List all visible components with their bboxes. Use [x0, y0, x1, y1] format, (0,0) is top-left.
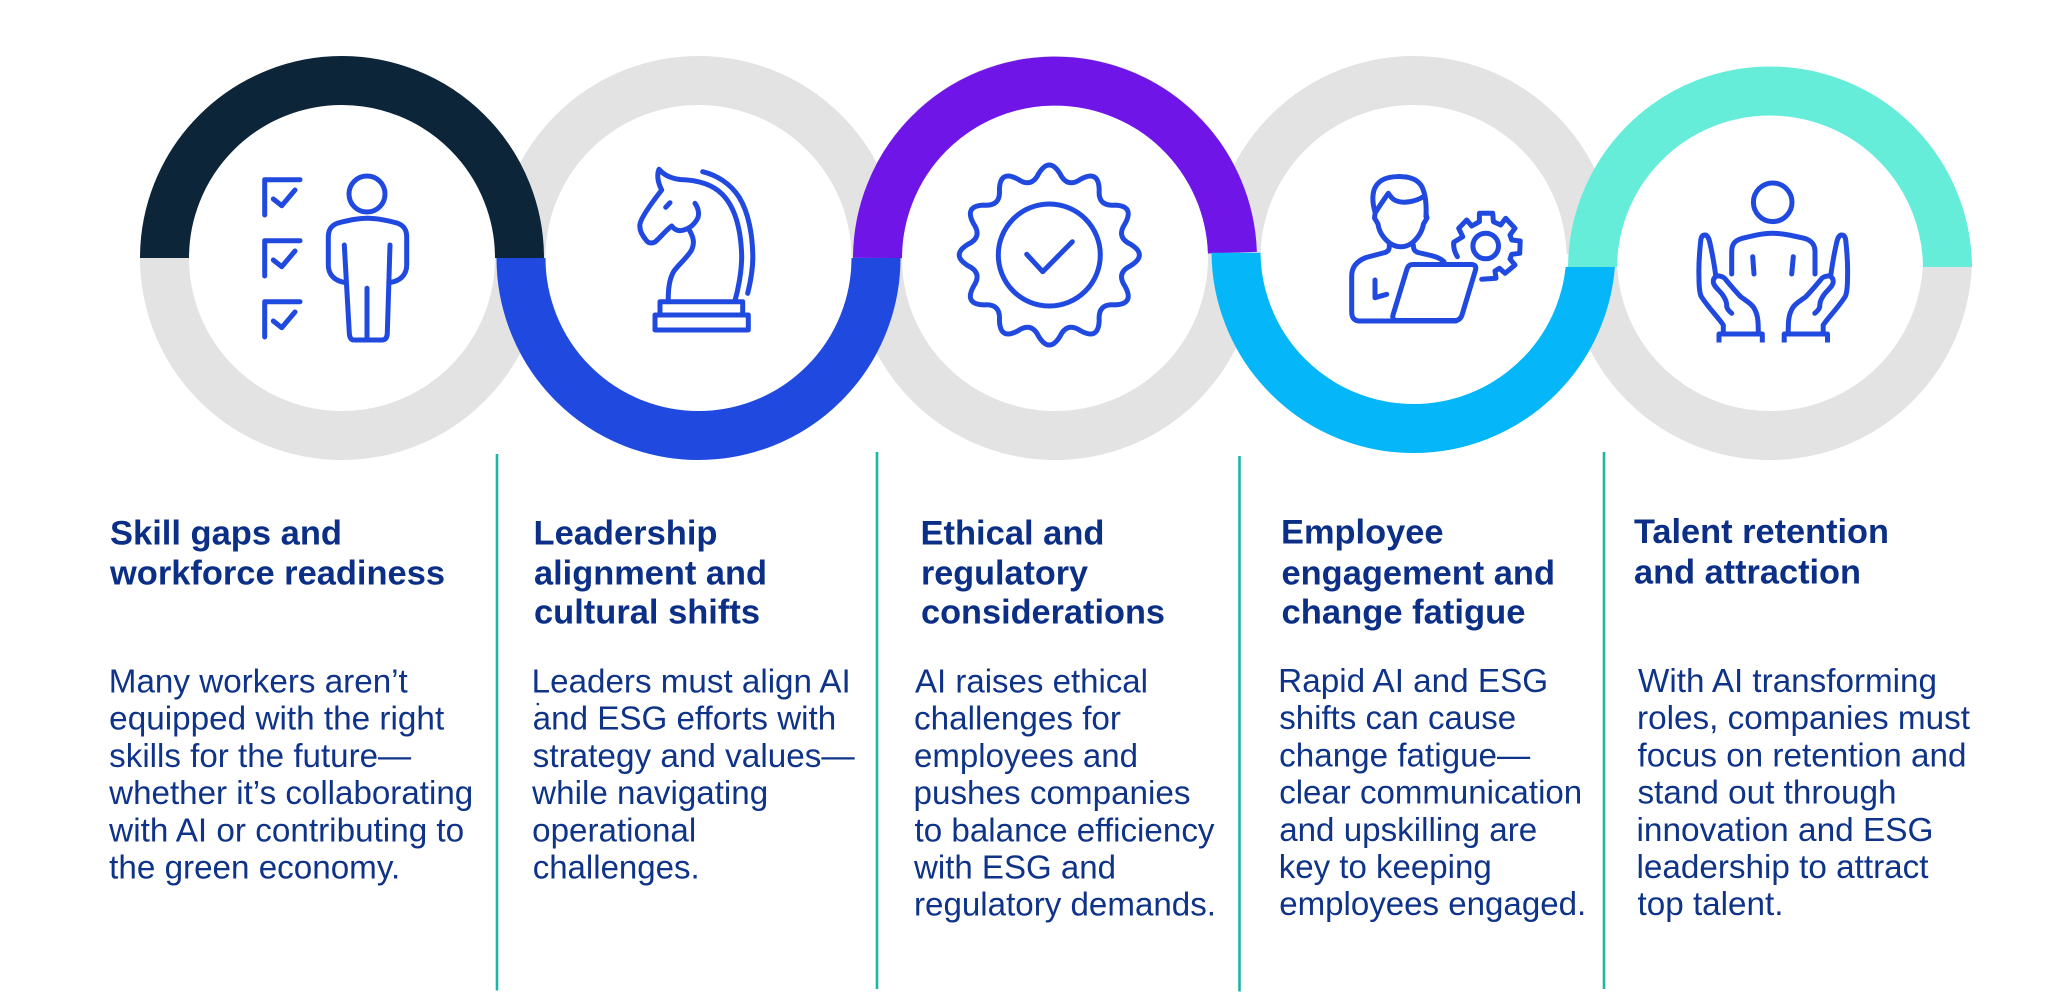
heading: leadership: Leadership [534, 514, 718, 552]
body: talent retention [1636, 662, 1970, 922]
column 2: leadership [531, 514, 855, 886]
body: ethical: pushes companies [914, 774, 1190, 811]
body: leadership: operational [532, 811, 696, 848]
body: employee engagement: employees engaged. [1279, 885, 1586, 922]
body: talent retention: roles, companies must [1637, 699, 1970, 736]
column 5: talent retention [1634, 513, 1970, 922]
body: ethical: with ESG and [913, 848, 1116, 886]
heading: employee engagement: change fatigue [1282, 594, 1526, 632]
icon: verified badge [959, 165, 1139, 345]
body: talent retention: top talent. [1638, 885, 1784, 922]
column 1: skill gaps [108, 514, 473, 886]
right hand [1784, 235, 1848, 342]
left hand [1699, 235, 1762, 342]
body: leadership: Leaders must align AI [532, 662, 851, 700]
body: ethical: AI raises ethical [915, 662, 1148, 700]
heading: skill gaps [109, 514, 445, 592]
heading: talent retention [1634, 513, 1889, 592]
body: skill gaps: equipped with the right [109, 700, 444, 737]
body: talent retention: stand out through [1638, 774, 1896, 811]
body: ethical: challenges for [914, 700, 1121, 737]
icon: employee with laptop and gear [1352, 177, 1520, 321]
heading: leadership: alignment and [534, 554, 767, 592]
body: skill gaps [108, 662, 473, 886]
body: employee engagement: clear communication [1279, 774, 1582, 811]
heading: talent retention: Talent retention [1634, 513, 1889, 551]
body: talent retention: leadership to attract [1636, 848, 1928, 885]
heading: employee engagement: engagement and [1282, 554, 1555, 592]
body: skill gaps: whether it’s collaborating [108, 774, 473, 811]
cyan arc [1212, 252, 1615, 453]
body: skill gaps: skills for the future— [109, 737, 411, 774]
body: employee engagement [1278, 662, 1586, 922]
body: employee engagement: key to keeping [1279, 848, 1492, 885]
heading: leadership: cultural shifts [534, 594, 760, 632]
teal arc [1568, 66, 1972, 267]
heading: ethical: Ethical and [920, 514, 1104, 552]
purple arc [878, 81, 1232, 258]
icon: person with checklist [265, 176, 407, 340]
body: ethical [913, 662, 1216, 923]
stray dot above "and" [536, 703, 539, 705]
icon: person supported by hands [1699, 183, 1848, 342]
body: skill gaps: with AI or contributing to [108, 811, 464, 848]
body: employee engagement: Rapid AI and ESG [1278, 662, 1548, 699]
heading: ethical [920, 514, 1165, 632]
grey background rings [164, 80, 1948, 436]
body: leadership: challenges. [533, 848, 700, 886]
body: skill gaps: Many workers aren’t [109, 662, 408, 700]
heading: skill gaps: workforce readiness [109, 554, 445, 592]
body: employee engagement: and upskilling are [1279, 811, 1537, 848]
body: leadership: strategy and values— [533, 737, 855, 774]
heading: employee engagement: Employee [1281, 514, 1444, 552]
column 4: employee engagement [1278, 514, 1586, 922]
column 3: ethical [913, 514, 1216, 923]
blue arc [521, 258, 876, 436]
navy arc [164, 81, 520, 258]
heading: leadership [534, 514, 767, 632]
body: skill gaps: the green economy. [109, 848, 400, 886]
body: employee engagement: shifts can cause [1279, 699, 1516, 736]
body: talent retention: focus on retention and [1638, 736, 1966, 773]
body: ethical: regulatory demands. [914, 886, 1216, 923]
body: leadership: while navigating [531, 774, 768, 811]
heading: employee engagement [1281, 514, 1555, 632]
body: employee engagement: change fatigue— [1279, 736, 1530, 773]
body: leadership [531, 662, 855, 886]
heading: talent retention: and attraction [1634, 554, 1861, 592]
body: talent retention: innovation and ESG [1636, 811, 1934, 848]
icon: chess knight [640, 169, 753, 330]
heading: ethical: considerations [921, 594, 1165, 632]
body: ethical: employees and [914, 737, 1138, 774]
heading: ethical: regulatory [921, 554, 1088, 592]
body: leadership: and ESG efforts with [533, 700, 836, 737]
heading: skill gaps: Skill gaps and [110, 514, 342, 552]
body: ethical: to balance efficiency [914, 811, 1215, 848]
body: talent retention: With AI transforming [1638, 662, 1937, 699]
